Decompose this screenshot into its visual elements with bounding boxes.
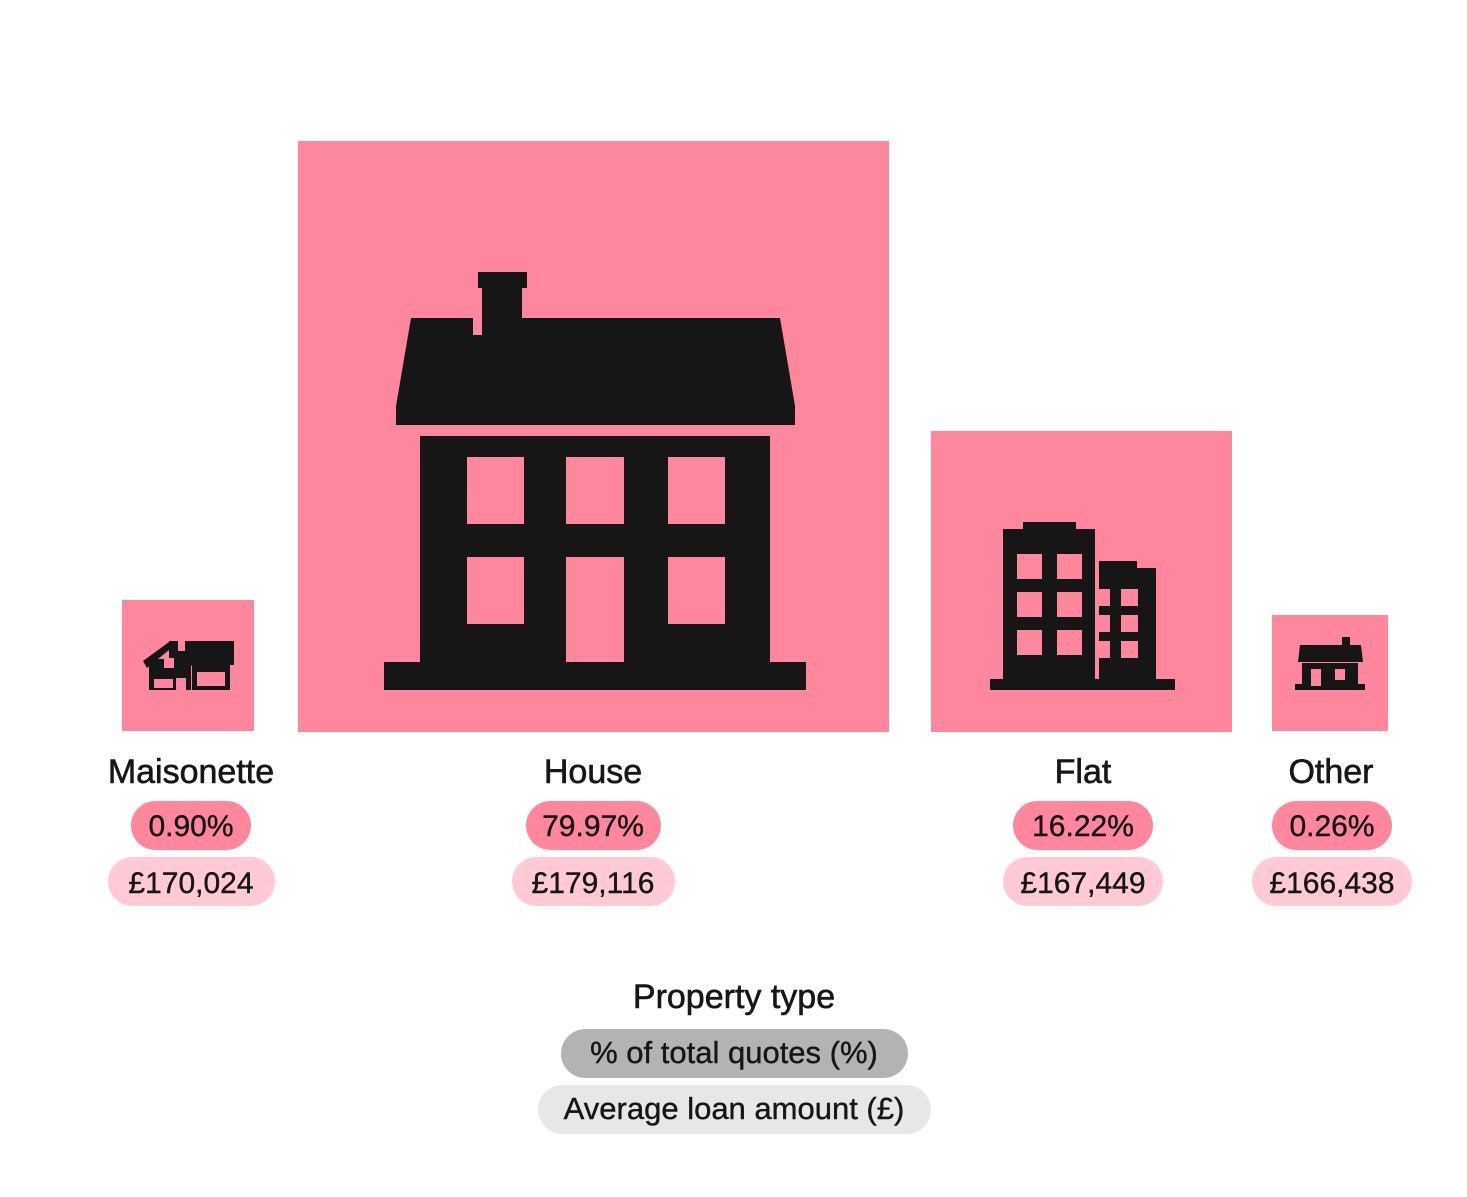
pills: percentages: 79.97% bbox=[542, 810, 644, 843]
label: maisonette: Maisonette bbox=[108, 753, 274, 791]
pills: loan amounts bbox=[108, 857, 1412, 906]
icon: maisonette bbox=[143, 641, 234, 690]
icon: other bbox=[1295, 637, 1365, 690]
legend bbox=[538, 978, 931, 1134]
pills: loan amounts: £167,449 bbox=[1020, 867, 1146, 900]
pills: percentages: 0.26% bbox=[1289, 810, 1375, 843]
panel: other bbox=[1272, 615, 1388, 731]
legend: % of total quotes (%) bbox=[590, 1035, 878, 1070]
pills: percentages bbox=[131, 801, 1392, 850]
legend: Property type bbox=[633, 978, 835, 1016]
icon: flat bbox=[990, 522, 1175, 690]
label: other: Other bbox=[1288, 753, 1374, 791]
panel: flat bbox=[931, 431, 1232, 732]
legend: Average loan amount (£) bbox=[564, 1091, 904, 1126]
label: house: House bbox=[544, 753, 642, 791]
panel: maisonette bbox=[122, 600, 254, 731]
pills: percentages: 16.22% bbox=[1032, 810, 1134, 843]
pills: loan amounts: £170,024 bbox=[128, 867, 254, 900]
panel: house bbox=[298, 141, 889, 732]
pills: loan amounts: £179,116 bbox=[532, 867, 654, 900]
labels bbox=[108, 753, 1374, 791]
icon: house bbox=[384, 272, 806, 690]
label: flat: Flat bbox=[1055, 753, 1112, 791]
pills: percentages: 0.90% bbox=[148, 810, 234, 843]
pills: loan amounts: £166,438 bbox=[1269, 867, 1395, 900]
